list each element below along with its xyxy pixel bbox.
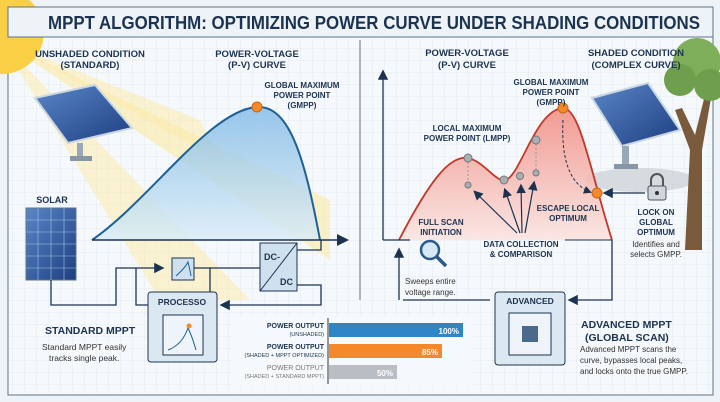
advanced processor box: ADVANCED [506,296,554,306]
label: full scan: FULL SCAN [418,218,464,227]
label: GMPP left [265,81,340,110]
icon: solar module [26,195,76,280]
heading: shaded condition: (COMPLEX CURVE) [591,60,681,71]
heading: P-V curve left: (P-V) CURVE [228,60,286,71]
text: standard MPPT [42,325,136,363]
label: data collection: DATA COLLECTION [484,240,559,249]
text: advanced MPPT: (GLOBAL SCAN) [585,332,669,344]
icon: shaded solar panel [592,83,680,169]
label: escape local optimum [537,204,599,223]
label: data collection: & COMPARISON [490,250,552,259]
icon: sun with rays [0,0,330,300]
text: lock on global optimum: GLOBAL [639,218,673,227]
text: advanced MPPT: and locks onto the true GMPP. [580,367,688,376]
heading: P-V curve right: POWER-VOLTAGE [425,48,509,59]
scan loop wire [399,240,612,300]
bar chart: power output [232,316,472,386]
text: advanced MPPT [580,319,688,376]
bar chart: power output: (SHADED + STANDARD MPPT) [244,374,324,380]
bar chart: power output: 100% [439,327,459,336]
text: lock on global optimum: OPTIMUM [637,228,675,237]
bar chart: power output: (UNSHADED) [289,332,324,338]
panel: unshaded heading [35,49,145,71]
label: GMPP right: GLOBAL MAXIMUM [514,78,589,87]
text: standard MPPT: tracks single peak. [49,353,119,363]
icon: solar module: SOLAR [36,195,68,205]
chart: shaded P-V curve [383,72,612,240]
heading: shaded condition: SHADED CONDITION [588,48,684,59]
text: advanced MPPT: Advanced MPPT scans the [580,345,677,354]
icon: solar panel tilted [35,85,132,161]
text: lock on global optimum: selects GMPP. [630,250,682,259]
heading: P-V curve right [425,48,509,71]
label: GMPP right: POWER POINT [523,88,580,97]
label: GMPP right [514,78,589,107]
heading: shaded condition [588,48,684,71]
icon: lock [605,174,666,200]
icon: tree [585,38,720,250]
bar chart: power output: 50% [377,369,393,378]
title [8,7,713,37]
label: full scan [418,218,464,237]
chart: unshaded P-V curve [92,102,346,240]
label: GMPP left: POWER POINT [274,91,331,100]
DC-DC box: DC [280,277,293,287]
advanced processor box [495,292,565,365]
bar chart: power output: 85% [422,348,438,357]
text: lock on global optimum: Identifies and [632,240,680,249]
label: full scan: INITIATION [420,228,462,237]
bar chart: power output: POWER OUTPUT [267,365,325,372]
label: LMPP [424,124,511,143]
text: standard MPPT: STANDARD MPPT [45,325,136,337]
bar chart: power output: (SHADED + MPPT OPTIMIZED) [244,353,324,359]
bar chart: power output: POWER OUTPUT [267,323,325,330]
text: sweeps [405,277,456,297]
label: escape local optimum: ESCAPE LOCAL [537,204,599,213]
heading: P-V curve right: (P-V) CURVE [438,60,496,71]
panel: unshaded heading: UNSHADED CONDITION [35,49,145,60]
text: advanced MPPT: curve, bypasses local peaks, [580,356,682,365]
text: lock on global optimum [630,208,682,259]
icon: small chip [172,258,194,280]
label: GMPP left: (GMPP) [288,101,317,110]
icon: magnifier [421,241,446,266]
bar chart: power output: POWER OUTPUT [267,344,325,351]
label: GMPP right: (GMPP) [537,98,566,107]
processor box: PROCESSO [158,297,206,307]
text: standard MPPT: Standard MPPT easily [42,342,127,352]
DC-DC box: DC- [264,252,280,262]
wiring left [51,240,321,305]
DC-DC box [260,243,297,291]
label: data collection [484,240,559,259]
label: LMPP: POWER POINT (LMPP) [424,134,511,143]
heading: P-V curve left: POWER-VOLTAGE [215,49,299,60]
label: GMPP left: GLOBAL MAXIMUM [265,81,340,90]
processor box [148,292,217,362]
text: sweeps: Sweeps entire [405,277,456,286]
label: escape local optimum: OPTIMUM [549,214,587,223]
text: lock on global optimum: LOCK ON [638,208,675,217]
text: advanced MPPT: ADVANCED MPPT [581,319,672,331]
heading: P-V curve left [215,49,299,71]
arrows: data collection [475,183,534,233]
panel: unshaded heading: (STANDARD) [61,60,119,71]
text: sweeps: voltage range. [405,288,456,297]
label: LMPP: LOCAL MAXIMUM [433,124,502,133]
